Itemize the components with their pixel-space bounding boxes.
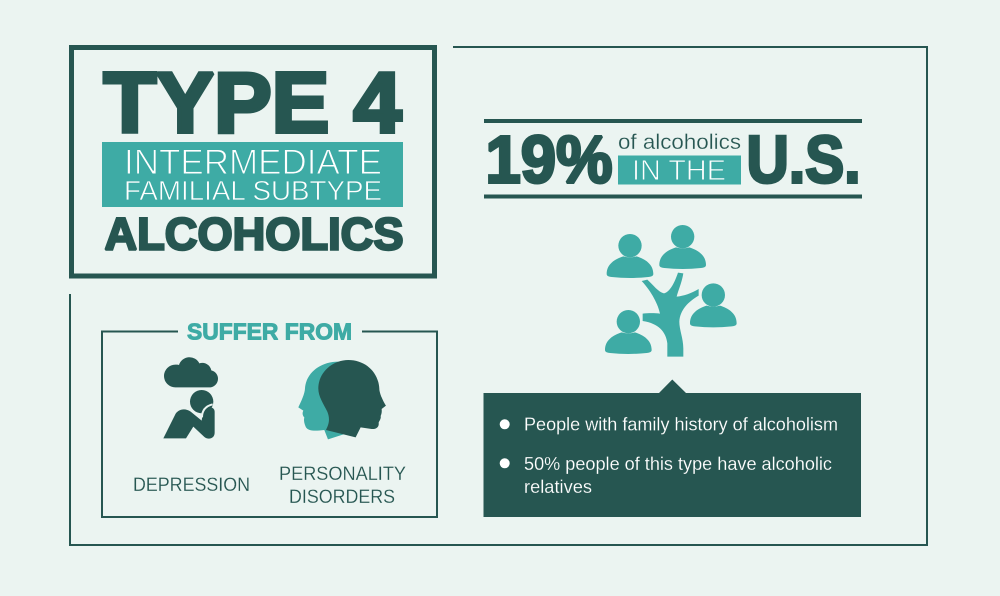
panel: suffer from xyxy=(102,318,437,517)
bullet: alcoholic relatives xyxy=(500,453,832,497)
tree trunk xyxy=(642,273,699,357)
bullet: alcoholic relatives: 50% people of this type have alcoholic xyxy=(524,453,832,474)
icon: family tree xyxy=(605,225,737,357)
band: in the: IN THE xyxy=(632,155,726,187)
text: of alcoholics: of alcoholics xyxy=(618,131,741,154)
bullet: family history: People with family history of alcoholism xyxy=(524,414,838,434)
person top xyxy=(659,225,706,269)
heading: suffer from: SUFFER FROM xyxy=(187,318,352,344)
stat: 19% of alcoholics in the U.S. xyxy=(484,119,862,198)
icon: depression xyxy=(163,357,218,439)
subtitle band: FAMILIAL SUBTYPE xyxy=(124,175,382,206)
text: U.S.: U.S. xyxy=(746,122,860,198)
panel: title xyxy=(72,48,434,276)
subtitle band: INTERMEDIATE xyxy=(124,143,382,182)
label: personality disorders xyxy=(279,464,406,508)
bullet: alcoholic relatives: relatives xyxy=(524,476,592,497)
person bottom left xyxy=(605,310,652,354)
heading: alcoholics: ALCOHOLICS xyxy=(104,208,404,260)
icon: two heads xyxy=(298,360,386,439)
heading: type 4: TYPE 4 xyxy=(104,56,402,151)
outer frame xyxy=(70,47,927,545)
label: depression: DEPRESSION xyxy=(133,475,250,496)
label: personality disorders: DISORDERS xyxy=(289,487,395,508)
person right xyxy=(690,283,737,327)
number: 19%: 19% xyxy=(486,122,612,198)
subtitle band xyxy=(102,142,403,207)
person top left xyxy=(607,234,653,278)
callout xyxy=(484,380,861,517)
label: personality disorders: PERSONALITY xyxy=(279,464,406,485)
